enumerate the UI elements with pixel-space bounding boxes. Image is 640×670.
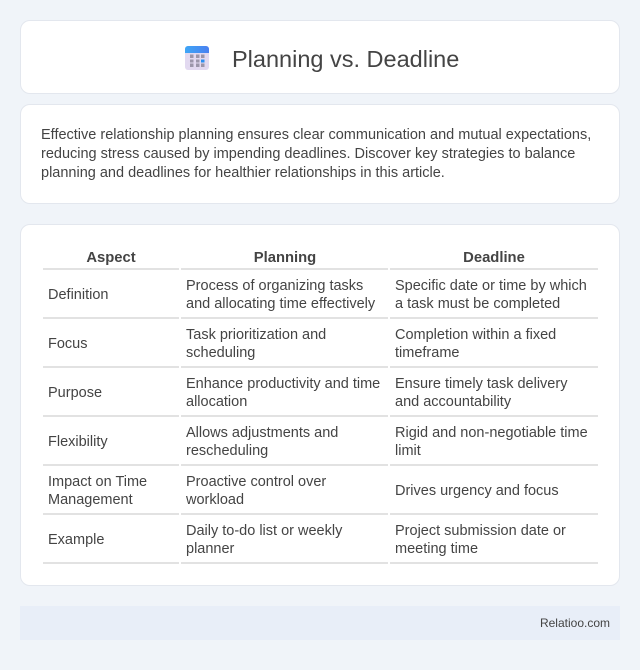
- header panel: [20, 20, 620, 94]
- cell: Definition deadline: Specific date or time by which: [395, 278, 587, 294]
- cell: Flexibility planning: Allows adjustments and: [186, 425, 338, 441]
- cell: Purpose deadline: [395, 376, 568, 410]
- cell: Purpose deadline: and accountability: [395, 394, 511, 410]
- cell: Focus planning: Task prioritization and: [186, 327, 326, 343]
- cell: Impact deadline: Drives urgency and focus: [395, 483, 559, 499]
- cell: Definition planning: Process of organizing tasks: [186, 278, 363, 294]
- cell: Example deadline: Project submission date or: [395, 523, 566, 539]
- intro text: planning and deadlines for healthier relationships in this article.: [41, 165, 445, 181]
- cell: Focus label: Focus: [48, 336, 88, 352]
- cell: Purpose label: Purpose: [48, 385, 102, 401]
- row: Example: [43, 523, 598, 564]
- cell: Purpose planning: Enhance productivity and time: [186, 376, 380, 392]
- column heading: Aspect: Aspect: [86, 250, 136, 266]
- footer bar: [20, 606, 620, 640]
- cell: Flexibility label: Flexibility: [48, 434, 108, 450]
- column heading: Planning: Planning: [254, 250, 316, 266]
- cell: Focus planning: scheduling: [186, 345, 255, 361]
- cell: Example deadline: meeting time: [395, 541, 478, 557]
- cell: Example planning: [186, 523, 342, 557]
- cell: Example planning: Daily to-do list or weekly: [186, 523, 342, 539]
- cell: Definition planning: and allocating time effectively: [186, 296, 375, 312]
- cell: Definition deadline: a task must be completed: [395, 296, 560, 312]
- cell: Focus deadline: timeframe: [395, 345, 459, 361]
- row: Flexibility: [43, 425, 598, 466]
- cell: Definition deadline: [395, 278, 587, 312]
- cell: Example label: Example: [48, 532, 104, 548]
- cell: Impact planning: workload: [186, 492, 244, 508]
- row: Impact on Time Management: [43, 474, 598, 515]
- cell: Example planning: planner: [186, 541, 234, 557]
- cell: Focus planning: [186, 327, 326, 361]
- intro panel: [20, 104, 620, 204]
- icon: calendar: [185, 46, 209, 70]
- cell: Impact label: Management: [48, 492, 133, 508]
- intro text: reducing stress caused by impending deadlines. Discover key strategies to balance: [41, 146, 575, 162]
- table panel: [20, 224, 620, 586]
- row: Focus: [43, 327, 598, 368]
- cell: Purpose planning: [186, 376, 380, 410]
- cell: Impact label: [48, 474, 147, 508]
- cell: Flexibility planning: rescheduling: [186, 443, 268, 459]
- intro text: Effective relationship planning ensures clear communication and mutual expectations,: [41, 127, 591, 143]
- cell: Definition planning: [186, 278, 376, 312]
- cell: Focus deadline: Completion within a fixed: [395, 327, 556, 343]
- cell: Impact planning: Proactive control over: [186, 474, 326, 490]
- cell: Flexibility deadline: limit: [395, 443, 421, 459]
- footer text: Relatioo.com: [540, 616, 610, 630]
- cell: Purpose planning: allocation: [186, 394, 247, 410]
- cell: Impact planning: [186, 474, 326, 508]
- column heading: Deadline: Deadline: [463, 250, 525, 266]
- header row: [43, 250, 598, 270]
- row: Definition: [43, 278, 598, 319]
- intro text: [41, 127, 591, 181]
- cell: Flexibility deadline: Rigid and non-negotiable time: [395, 425, 588, 441]
- cell: Flexibility planning: [186, 425, 338, 459]
- cell: Focus deadline: [395, 327, 556, 361]
- table: [43, 250, 598, 564]
- cell: Flexibility deadline: [395, 425, 588, 459]
- cell: Impact label: Impact on Time: [48, 474, 147, 490]
- cell: Purpose deadline: Ensure timely task delivery: [395, 376, 567, 392]
- cell: Definition label: Definition: [48, 287, 108, 303]
- row: Purpose: [43, 376, 598, 417]
- cell: Example deadline: [395, 523, 566, 557]
- title: Planning vs. Deadline: [232, 46, 459, 72]
